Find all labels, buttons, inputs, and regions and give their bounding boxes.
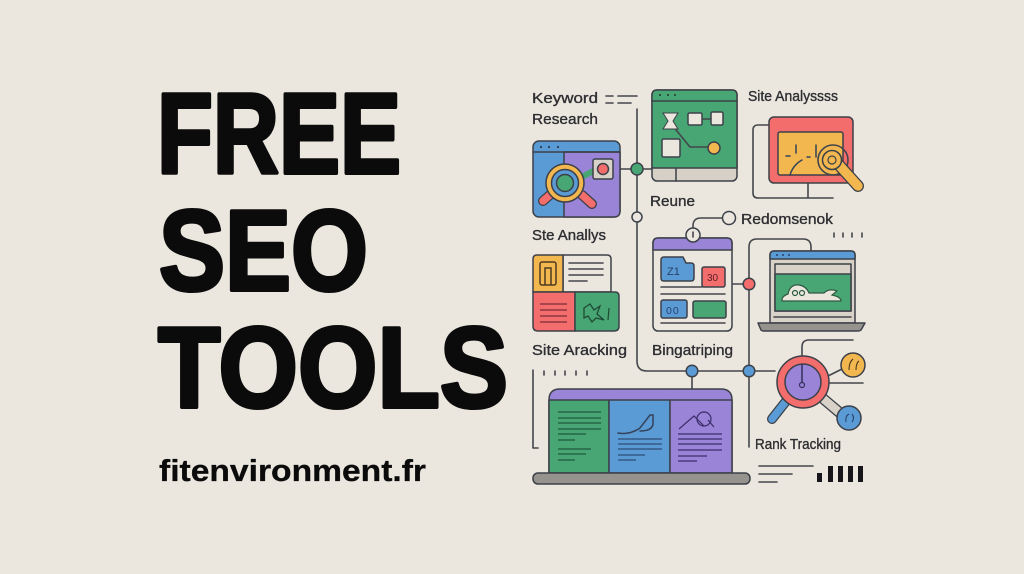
title bbox=[157, 71, 508, 432]
left bracket with ticks bbox=[533, 370, 587, 448]
label: keyword research: Research bbox=[532, 111, 598, 128]
label: site arackling: Site Aracking bbox=[532, 342, 627, 359]
blue nodes bbox=[686, 365, 755, 377]
website address: fitenvironment.fr bbox=[159, 453, 426, 488]
panel: middle dashboard bbox=[653, 238, 732, 331]
blue dial bbox=[837, 406, 861, 430]
connector lines bbox=[620, 109, 853, 447]
white node bbox=[632, 212, 642, 222]
panel: green flow window bbox=[652, 90, 737, 181]
label: redomsenok: Redomsenok bbox=[741, 211, 834, 228]
label: site analysis left: Ste Anallys bbox=[532, 227, 606, 244]
legend lines and bars bbox=[759, 466, 863, 482]
icon: magnifier with handle bbox=[818, 145, 858, 186]
panel: bottom laptop bbox=[533, 389, 750, 484]
yellow dial bbox=[841, 353, 865, 377]
label: reune: Reune bbox=[650, 193, 695, 210]
green column lines bbox=[558, 412, 601, 460]
red node bbox=[743, 278, 755, 290]
panel: middle dashboard: Z1 bbox=[667, 266, 680, 278]
purple column sketch and lines bbox=[678, 412, 722, 461]
title: FREE bbox=[157, 71, 401, 198]
label: keyword research bbox=[532, 90, 637, 128]
label: bingatriping: Bingatriping bbox=[652, 342, 733, 359]
panel: laptop with green screen bbox=[758, 251, 865, 331]
title: SEO bbox=[159, 188, 368, 315]
panel: middle dashboard: 30 bbox=[707, 273, 719, 284]
dotted ticks bbox=[834, 233, 862, 237]
white connector node bbox=[686, 228, 700, 242]
label: site analysis top: Site Analyssss bbox=[748, 88, 838, 105]
label: keyword research: Keyword bbox=[532, 90, 598, 107]
blue column sketch and lines bbox=[618, 415, 662, 460]
label: rank tracking: Rank Tracking bbox=[755, 436, 841, 453]
green node bbox=[631, 163, 643, 175]
panel: middle dashboard: 00 bbox=[666, 305, 680, 317]
panel: red analysis window bbox=[753, 117, 858, 198]
panel: four-block grid bbox=[533, 255, 619, 331]
panel: keyword research browser bbox=[533, 141, 620, 217]
rank tracking gauge bbox=[772, 353, 865, 430]
icon: magnifier bbox=[543, 164, 595, 204]
title: TOOLS bbox=[158, 305, 508, 432]
